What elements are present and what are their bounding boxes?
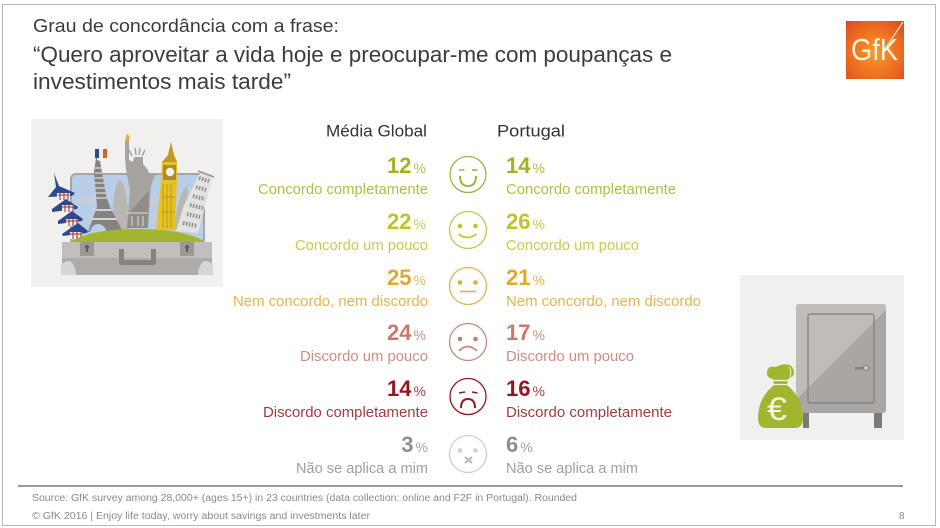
row: Discordo completamente: 16%	[506, 376, 545, 401]
row: Não se aplica a mim: 3%	[401, 432, 428, 457]
footer: © GfK 2016 | Enjoy life today, worry about savings and investments later	[32, 511, 371, 522]
row: Discordo um pouco	[300, 320, 634, 365]
pagoda	[48, 173, 88, 239]
row: Nem concordo, nem discordo: 21%	[506, 265, 545, 290]
illustration: safe and money bag	[740, 275, 904, 440]
row: Nem concordo, nem discordo	[233, 265, 701, 310]
title: investimentos mais tarde”	[33, 69, 291, 94]
row: Discordo um pouco: Discordo um pouco	[506, 349, 634, 365]
row: Discordo completamente: Discordo completamente	[263, 405, 428, 421]
row: Concordo um pouco	[295, 209, 639, 254]
source note: Source: GfK survey among 28,000+ (ages 15+) in 23 countries (data collection: online and F2F in Portugal). Rounded	[32, 493, 577, 504]
row: Nem concordo, nem discordo: Nem concordo, nem discordo	[233, 294, 428, 310]
title	[33, 15, 672, 94]
logo: GfK	[846, 21, 904, 79]
illustration: suitcase with world landmarks	[31, 119, 223, 287]
statue of liberty	[125, 133, 155, 228]
row: Não se aplica a mim: Não se aplica a mim	[296, 461, 428, 477]
row: Discordo um pouco: 24%	[387, 320, 426, 345]
row: Concordo completamente: Concordo completamente	[258, 182, 428, 198]
title: “Quero aproveitar a vida hoje e preocupar-me com poupanças e	[33, 42, 672, 67]
column heading: Portugal: Portugal	[497, 122, 565, 140]
row: Discordo um pouco: Discordo um pouco	[300, 349, 428, 365]
row: Concordo um pouco: Concordo um pouco	[506, 238, 639, 254]
row: Discordo completamente: 14%	[387, 376, 426, 401]
icon: big smile	[450, 156, 486, 192]
row: Concordo completamente: 14%	[506, 153, 545, 178]
icon: sad face	[450, 324, 486, 360]
row: Nem concordo, nem discordo: Nem concordo, nem discordo	[506, 294, 701, 310]
tower of pisa	[176, 171, 214, 233]
row: Não se aplica a mim	[296, 432, 638, 477]
row: Não se aplica a mim: 6%	[506, 432, 533, 457]
row: Concordo um pouco: 22%	[387, 209, 426, 234]
icon: smile	[450, 212, 486, 248]
title: Grau de concordância com a frase:	[33, 15, 339, 36]
row: Concordo um pouco: Concordo um pouco	[295, 238, 428, 254]
row: Concordo completamente	[258, 153, 676, 198]
row: Discordo completamente	[263, 376, 672, 421]
row: Discordo completamente: Discordo completamente	[506, 405, 672, 421]
column heading: Média Global: Média Global	[326, 122, 427, 140]
row: Nem concordo, nem discordo: 25%	[387, 265, 426, 290]
row: Concordo completamente: Concordo completamente	[506, 182, 676, 198]
logo: GfK: GfK	[851, 32, 898, 67]
row: Discordo um pouco: 17%	[506, 320, 545, 345]
page number: 8	[899, 511, 905, 522]
eiffel tower	[88, 149, 123, 232]
icon: not applicable face	[450, 436, 486, 472]
row: Não se aplica a mim: Não se aplica a mim	[506, 461, 638, 477]
suitcase body	[61, 229, 213, 275]
big ben	[156, 142, 177, 230]
icon: very sad face	[450, 378, 486, 414]
row: Concordo completamente: 12%	[387, 153, 426, 178]
icon: neutral face	[450, 268, 486, 304]
row: Concordo um pouco: 26%	[506, 209, 545, 234]
illustration: safe and money bag: €	[767, 391, 787, 427]
